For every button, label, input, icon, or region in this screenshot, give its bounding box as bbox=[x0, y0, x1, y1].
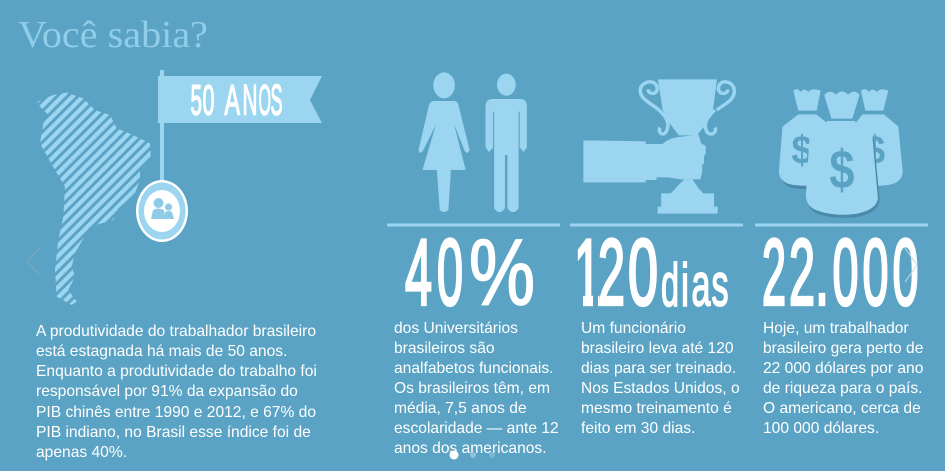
rule: column 3 bbox=[755, 224, 928, 226]
flag: 50 anos bbox=[158, 70, 322, 185]
title: Você sabia? bbox=[18, 14, 208, 56]
icon: medallion with people bbox=[136, 180, 188, 242]
text block: productivity: está estagnada há mais de 50 anos. bbox=[36, 343, 287, 360]
big number: 22.000: 0 bbox=[862, 220, 888, 324]
text block: productivity: PIB indiano, no Brasil esse índice foi de bbox=[36, 424, 311, 441]
big number: 40%: 0 bbox=[437, 220, 463, 324]
left money bag: $ bbox=[791, 127, 812, 172]
big number: 120 dias bbox=[568, 220, 728, 324]
big number: 22.000: 2 bbox=[789, 220, 815, 324]
text block: productivity: PIB chinês entre 1990 e 2012, e 67% do bbox=[36, 404, 316, 421]
text block: productivity: A produtividade do trabalhador brasileiro bbox=[36, 323, 316, 340]
text block: 22.000: O americano, cerca de bbox=[763, 400, 921, 417]
big number: 40% bbox=[405, 220, 535, 324]
icon: woman and man bbox=[419, 72, 527, 212]
big number: 120 dias: a bbox=[692, 252, 711, 318]
big number: 22.000: 2 bbox=[762, 220, 786, 324]
big number: 22.000: 0 bbox=[832, 220, 858, 324]
flag: 50 anos: 5 bbox=[190, 76, 202, 124]
text block: 120 dias: mesmo treinamento é bbox=[581, 400, 732, 417]
big number: 22.000: . bbox=[815, 220, 829, 324]
text block: productivity: apenas 40%. bbox=[36, 444, 127, 461]
text block: productivity: responsável por 91% da expansão do bbox=[36, 383, 298, 400]
icon: hand holding trophy bbox=[583, 79, 734, 214]
chevron: previous bbox=[27, 248, 40, 275]
big number: 22.000 bbox=[762, 220, 918, 324]
chevron: next bbox=[905, 248, 917, 282]
icon: money bags bbox=[779, 89, 903, 218]
big number: 120 dias: 2 bbox=[598, 220, 625, 324]
text block: 22.000: brasileiro gera perto de bbox=[763, 340, 923, 357]
text block: 120 dias: feito em 30 dias. bbox=[581, 420, 695, 437]
text block: 120 dias: Nos Estados Unidos, o bbox=[581, 380, 740, 397]
big number: 40%: % bbox=[469, 220, 535, 324]
text block: 40%: brasileiros são bbox=[394, 340, 495, 357]
rule: column 1 bbox=[387, 224, 560, 226]
right money bag: $ bbox=[864, 127, 885, 172]
front money bag: $ bbox=[829, 139, 855, 201]
big number: 120 dias: 0 bbox=[628, 220, 658, 324]
flag: 50 anos: 0 bbox=[202, 76, 214, 124]
text block: 22.000: de riqueza para o país. bbox=[763, 380, 923, 397]
big number: 120 dias: d bbox=[661, 252, 679, 318]
text block: 120 dias: brasileiro leva até 120 bbox=[581, 340, 734, 357]
carousel dots bbox=[450, 450, 495, 460]
text block: 120 dias: Um funcionário bbox=[581, 320, 686, 337]
text block: productivity: Enquanto a produtividade do trabalho foi bbox=[36, 363, 317, 380]
text block: 40%: escolaridade — ante 12 bbox=[394, 420, 559, 437]
text block: 40%: Os brasileiros têm, em bbox=[394, 380, 550, 397]
text block: 40%: analfabetos funcionais. bbox=[394, 360, 554, 377]
map: South America bbox=[37, 93, 151, 305]
text block: 40%: média, 7,5 anos de bbox=[394, 400, 527, 417]
flag: 50 anos: A bbox=[224, 76, 240, 124]
big number: 120 dias: s bbox=[712, 252, 728, 318]
flag: 50 anos: S bbox=[270, 76, 282, 124]
text block: 22.000: Hoje, um trabalhador bbox=[763, 320, 909, 337]
flag: 50 anos: O bbox=[258, 76, 271, 124]
text block: 40%: anos dos americanos. bbox=[394, 440, 547, 457]
big number: 120 dias: i bbox=[681, 252, 689, 318]
flag: 50 anos: N bbox=[242, 76, 258, 124]
text block: 22.000: 22 000 dólares por ano bbox=[763, 360, 924, 377]
text: 0 bbox=[892, 220, 918, 324]
big number: 120 dias: 1 bbox=[574, 220, 601, 324]
rule: column 2 bbox=[570, 224, 743, 226]
big number: 40%: 4 bbox=[405, 220, 432, 324]
text block: 22.000: 100 000 dólares. bbox=[763, 420, 879, 437]
text block: 40%: dos Universitários bbox=[394, 320, 518, 337]
text block: 120 dias: dias para ser treinado. bbox=[581, 360, 736, 377]
